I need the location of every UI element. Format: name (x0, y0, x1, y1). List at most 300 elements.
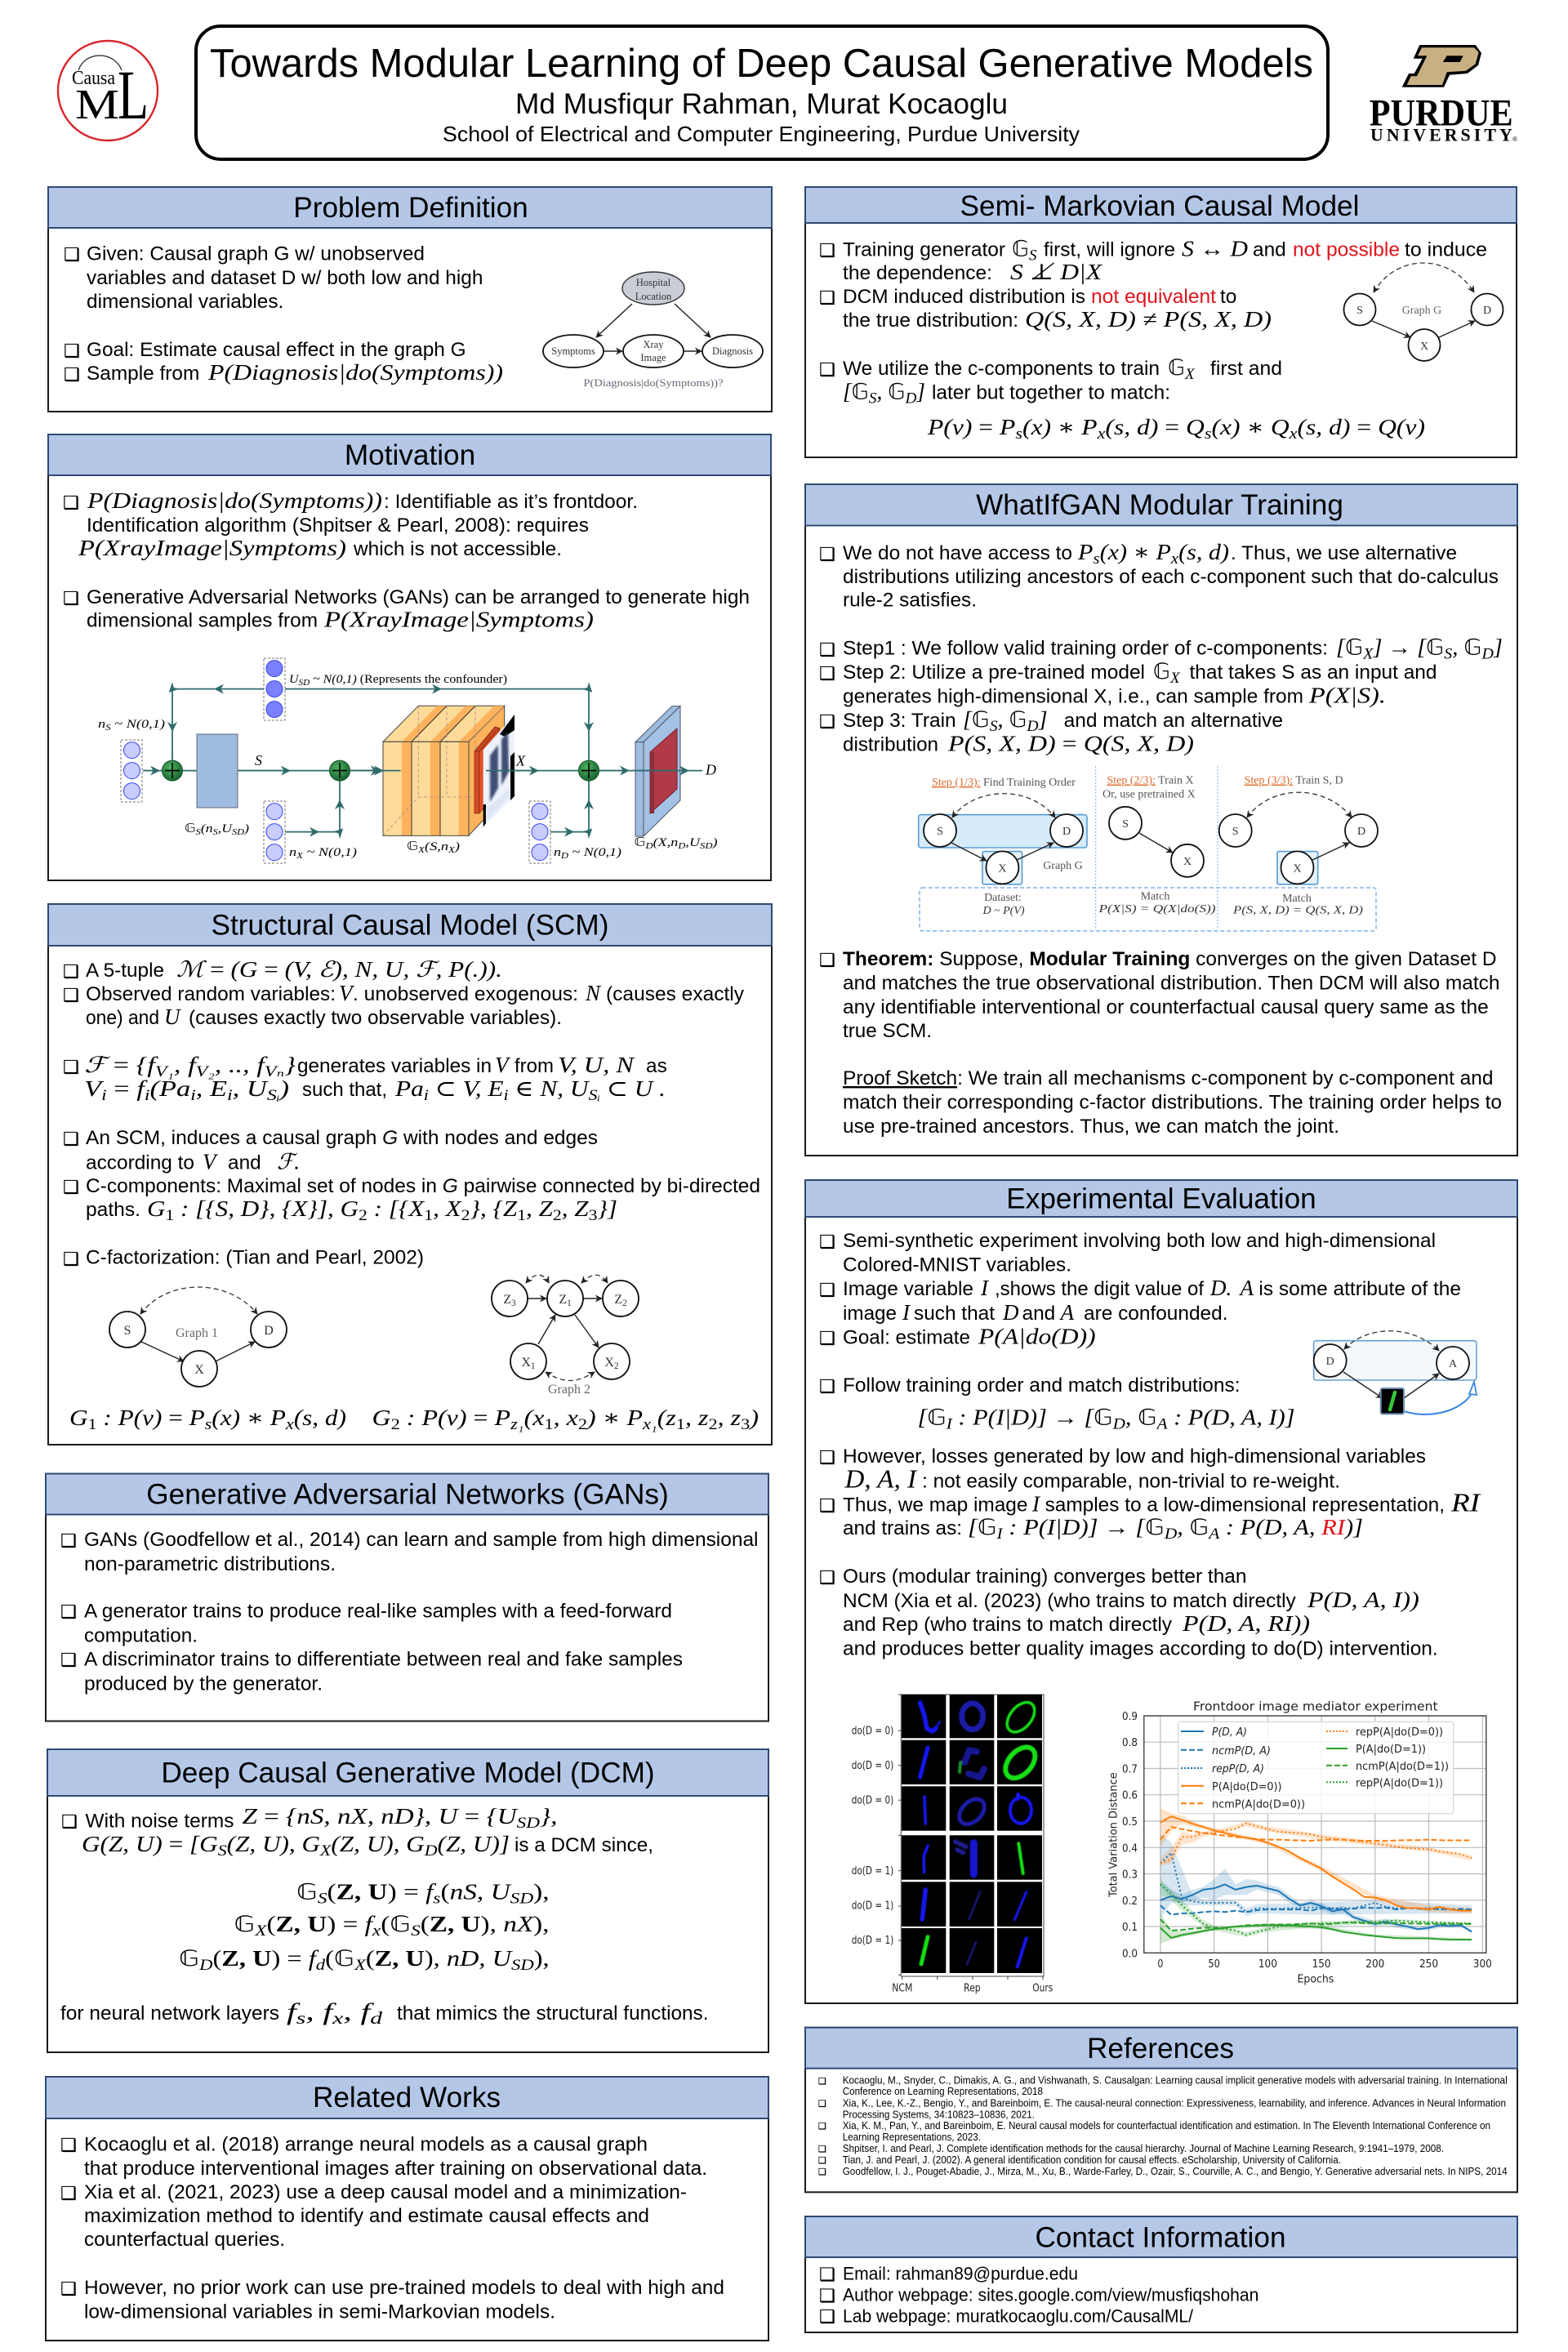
legend: ncmP(D, A) (1212, 1745, 1271, 1757)
equation: G2 factorization: = P (474, 1405, 508, 1430)
text: c-components: 1 (517, 1207, 526, 1224)
y axis (1107, 1711, 1138, 1960)
text: functions: V₂ (196, 1063, 215, 1080)
graph 2: Z (614, 1293, 622, 1307)
diagram: GAN architecture: D (644, 842, 653, 851)
text: functions: V (495, 1053, 511, 1077)
diagram: graph G: X (1420, 341, 1428, 353)
text: mapping: , (1177, 1515, 1190, 1539)
text: goal (819, 1325, 1096, 1349)
diagram: GAN architecture: ) (711, 836, 717, 849)
text: GANs arrangement: P(XrayImage|Symptoms) (323, 608, 594, 632)
equation: G2 factorization: ) ∗ P (586, 1405, 643, 1430)
logo: CausalML: L (118, 56, 149, 134)
text: c-components: , Z (562, 1196, 590, 1221)
text: functions: V, U, N (558, 1053, 635, 1077)
reference list: Kocaoglu, M., Snyder, C., Dimakis, A. G., and Vishwanath, S. Causalgan: Learning causal implicit generative models with adversarial training. In International (843, 2075, 1508, 2087)
text: identifiability: P(XrayImage|Symptoms) (78, 536, 346, 560)
text: functions: ⊂ U . (600, 1076, 666, 1101)
text: functions: i (145, 1087, 150, 1104)
text: step 1: [𝔾 (1336, 635, 1362, 661)
equation: G_X: Z, U ) = f (276, 1912, 371, 1936)
causal diagram: hospital (543, 272, 763, 389)
text: Kocaoglu (60, 2133, 707, 2180)
x axis: 100 (1258, 1958, 1277, 1971)
text: proof sketch: use pre-trained ancestors. Thus, we can match the joint. (843, 1116, 1339, 1138)
equation: training order: : P(I|D)] → [ (952, 1405, 1095, 1429)
text: image variable: D. (1209, 1276, 1232, 1300)
text: no access: distributions utilizing ancestors of each c-component such that do-calculus (843, 566, 1499, 588)
text: theorem: and matches the true observational distribution. Then DCM will also match (843, 972, 1499, 994)
step 3 graph (1219, 792, 1378, 884)
text: image variable: A (1238, 1276, 1254, 1300)
text: step 1: D (1481, 646, 1494, 663)
logo: Purdue University: PURDUE (1370, 92, 1513, 134)
text: functions: as (646, 1055, 667, 1077)
diagram: GAN architecture: ~ N(0,1) (310, 673, 360, 686)
text: causal graph: ℱ. (277, 1150, 300, 1174)
diagram: GAN architecture: ,U (685, 836, 701, 849)
text: image variable: I (980, 1276, 990, 1300)
x axis: Epochs (1297, 1974, 1334, 1986)
equation: matching: (s, d) (1105, 415, 1165, 439)
text: training generator: not possible (1293, 239, 1400, 261)
text: however: low-dimensional variables in semi-Markovian models. (84, 2301, 555, 2323)
equation: G_S: s (433, 1890, 440, 1908)
text: image variable: such that (914, 1303, 995, 1325)
text: mapping: and trains as: (843, 1517, 962, 1539)
text: training generator: ❑ (819, 241, 835, 261)
image grid: generated digits: do(D = 0) (852, 1794, 893, 1806)
equation: G_D: D (198, 1957, 213, 1974)
reference list: ❑ (818, 2121, 826, 2132)
text: variables (63, 981, 745, 1029)
text: step 1: 𝔾 (1426, 635, 1444, 661)
step 1 graph: X (998, 862, 1006, 875)
equation: G_X: Z, U ), nX ), (430, 1912, 546, 1936)
text: functions: , E (196, 1076, 228, 1101)
y axis: 0.8 (1122, 1737, 1138, 1749)
text: step 1: S (1444, 646, 1453, 663)
title block (196, 26, 1328, 159)
image: chest x-ray (483, 715, 514, 827)
diagram: GAN architecture: (S,n (425, 840, 448, 853)
text: no access: We do not have access to (843, 542, 1072, 564)
equation: training order: A (1155, 1416, 1168, 1432)
text: functions: i (424, 1087, 429, 1104)
diagram: GAN architecture: SD (232, 828, 245, 837)
equation: G2 factorization: 1 (676, 1416, 685, 1433)
equation: G2 factorization: G (372, 1405, 388, 1430)
text: step 1: 𝔾 (1463, 635, 1482, 661)
text: theorem (819, 948, 1499, 1042)
text: neural network layers: d (370, 2008, 383, 2028)
image grid: generated digits: do(D = 1) (852, 1900, 893, 1912)
x axis (1157, 1958, 1492, 1986)
text: noise terms: ❑ (61, 1812, 78, 1833)
x axis: 200 (1365, 1958, 1384, 1971)
text: discriminator: A discriminator trains to differentiate between real and fake samples (84, 1649, 683, 1671)
text: functions: V₁ (155, 1063, 174, 1080)
equation: G_S: 𝔾 (296, 1880, 318, 1904)
panel: Semi-Markovian Causal Model (805, 187, 1517, 457)
text: step 2: generates high-dimensional X, i.e., can sample from (843, 686, 1303, 707)
equation: training order: 𝔾 (1138, 1405, 1157, 1431)
text: step 3: 𝔾 (1009, 707, 1027, 733)
equation: training order: : P(D, A, I)] (1168, 1405, 1295, 1429)
heading: Contact Information (805, 2216, 1517, 2257)
step 1 graph: S (937, 826, 943, 838)
equation: G1 factorization: x (285, 1416, 294, 1433)
equation: G2 factorization: : P(v) (400, 1405, 474, 1430)
equation: G2 factorization: x₁ (642, 1416, 657, 1433)
reference list: Xia, K. M., Pan, Y., and Bareinboim, E. Neural causal models for counterfactual identification and estimation. In The Eleventh International Conference on (843, 2120, 1490, 2132)
text: step 2: P(X|S). (1308, 683, 1386, 707)
diagram: GAN architecture: 𝔾 (185, 821, 196, 835)
step 2 graph (1109, 807, 1204, 877)
diagram: GAN architecture: 𝔾 (634, 835, 646, 849)
text: training generator: first, will ignore (1044, 239, 1175, 261)
text: mapping: D (1164, 1526, 1178, 1543)
text: discriminator: ❑ (60, 1650, 77, 1671)
text: c-components training: 𝔾 (888, 380, 905, 405)
text: no access: (s, d) (1178, 540, 1229, 564)
text: c-components: , X (433, 1196, 462, 1221)
text: step 1: ❑ (819, 640, 835, 661)
text: mapping: : P(I|D)] → [ (1003, 1515, 1147, 1539)
text: causal graph: V (203, 1150, 219, 1174)
equation: G_X: x (372, 1922, 381, 1940)
y axis: 0.4 (1122, 1842, 1138, 1855)
text: noise terms: X (319, 1842, 332, 1860)
text: noise terms: With noise terms (85, 1811, 234, 1833)
equation: G1 factorization: (s, d) (294, 1405, 346, 1430)
equation: matching: (x) ∗ Q (1211, 415, 1290, 439)
text: however: However, no prior work can use pre-trained models to deal with high and (84, 2277, 724, 2299)
text: c-components training: We utilize the c-components to train (843, 358, 1160, 380)
diagram: training steps: Or, use pretrained X (1102, 789, 1196, 801)
y axis: 0.7 (1122, 1764, 1138, 1775)
graph 2: X (521, 1356, 531, 1370)
text: generator: A generator trains to produce real-like samples with a feed-forward (84, 1600, 672, 1622)
logo: CausalML: M (75, 82, 119, 128)
diagram: GAN architecture: D (705, 762, 716, 778)
equation: training order: , (1125, 1405, 1138, 1429)
text: losses (819, 1446, 1426, 1494)
panel: Deep Causal Generative Model (47, 1749, 768, 2052)
logo: Purdue University (1370, 45, 1517, 145)
text: mapping: ❑ (819, 1496, 835, 1517)
legend: P(D, A) (1212, 1726, 1247, 1739)
diagram: training steps: Match (1282, 893, 1312, 905)
step 3 graph: S (1232, 826, 1239, 838)
text: training generator: Training generator (843, 239, 1005, 261)
text: identifiability: ❑ (63, 493, 79, 514)
logo: Purdue University: UNIVERSITY (1370, 126, 1512, 145)
text: training order: ❑ (819, 1377, 835, 1397)
reference list: ❑ (818, 2167, 826, 2177)
panel: Related Works (46, 2077, 768, 2341)
text: step 3: ❑ (819, 712, 835, 733)
text: contact details: ❑ (819, 2265, 835, 2285)
text: Kocaoglu: Kocaoglu et al. (2018) arrange neural models as a causal graph (84, 2133, 648, 2155)
text: image variable: D (1002, 1300, 1019, 1325)
text: variables: (causes exactly (606, 983, 745, 1005)
reference list: ❑ (818, 2099, 826, 2109)
text: neural network layers: , f (343, 1998, 374, 2025)
equation: G_S: Z, U ) = f (336, 1880, 432, 1904)
text: neural network layers (60, 1998, 709, 2028)
step 1 graph: Graph G (1043, 860, 1083, 872)
text: functions: ⊂ V, E (429, 1076, 504, 1101)
text: image variable: I (902, 1300, 911, 1325)
text: c-components training: D (904, 390, 917, 408)
text: ours: P(D, A, RI)) (1182, 1611, 1310, 1636)
text: mapping: RI)] (1321, 1515, 1361, 1539)
diagram: D A image graph: A (1449, 1358, 1458, 1370)
image grid: generated digits: Ours (1032, 1982, 1053, 1994)
panel: Structural Causal Model (48, 904, 772, 1445)
text: c-components: G (147, 1196, 163, 1221)
text: c-components: 1 (165, 1207, 174, 1224)
text: identifiability: Identification algorithm (Shpitser & Pearl, 2008): requires (87, 514, 589, 537)
reference list: Learning Representations, 2023. (843, 2132, 981, 2143)
text: c-components: }] (597, 1196, 617, 1221)
text: c-components training: , (877, 380, 888, 404)
text: step 3 (819, 707, 1283, 755)
text: theorem: Theorem: Suppose, Modular Training converges on the given Dataset D (843, 948, 1496, 970)
diagram: training steps: Step (2/3): Train X (1107, 775, 1194, 787)
text: mapping: I (1031, 1491, 1041, 1516)
heading: References: References (1087, 2033, 1234, 2065)
equation: G_D: ), (534, 1946, 550, 1971)
equation: G_D: ( (212, 1946, 221, 1971)
y axis: Total Variation Distance (1107, 1772, 1120, 1898)
text: given: dimensional variables. (87, 291, 283, 313)
text: given: variables and dataset D w/ both low and high (87, 267, 483, 289)
text: c-components: 2 (461, 1207, 470, 1224)
x axis: 150 (1312, 1958, 1331, 1971)
text: not equivalent: Q(S, X, D) ≠ P(S, X, D) (1025, 307, 1272, 332)
graph 2: Z (559, 1293, 567, 1307)
text: c-components: 2 (553, 1207, 562, 1224)
text: noise terms: (Z, U), G (227, 1832, 320, 1856)
text: functions: from (514, 1055, 554, 1077)
diagram: GAN architecture: S (105, 724, 111, 733)
text: causal graph: ❑ (63, 1129, 79, 1150)
equation: G2 factorization: 2 (708, 1416, 718, 1433)
equation: G1 factorization: (x) ∗ P (212, 1405, 286, 1430)
text: mapping: 𝔾 (1145, 1515, 1165, 1540)
reference list: Conference on Learning Representations, 2018 (843, 2086, 1043, 2097)
text: step 3: [𝔾 (963, 707, 989, 733)
text: variables: U (164, 1004, 181, 1029)
graph 2: Z (503, 1293, 511, 1307)
text: image variable: are confounded. (1084, 1303, 1228, 1325)
text: variables: one) and (86, 1007, 159, 1029)
text: c-components training: ] (915, 380, 925, 404)
diagram: GAN architecture: D (560, 852, 569, 861)
text: variables: Observed random variables: (86, 983, 336, 1005)
text: step 1: , (1452, 635, 1463, 660)
text: semi-synthetic: Semi-synthetic experiment involving both low and high-dimensional (843, 1230, 1436, 1252)
text: mapping: A (1207, 1526, 1220, 1543)
equation: matching: = Q(v) (1356, 415, 1417, 439)
step 2 graph: X (1183, 856, 1192, 868)
step 1 graph (924, 794, 1083, 884)
equation: G2 factorization: , z (718, 1405, 742, 1430)
diagram: D A image graph (1314, 1331, 1477, 1414)
heading: DCM (47, 1749, 768, 1796)
diagram: GAN architecture: ~ N(0,1) (111, 718, 165, 731)
image: digit sample (1381, 1388, 1404, 1414)
graph 2: 3 (511, 1298, 516, 1308)
diagram: training steps: Dataset: (984, 892, 1022, 904)
text: GANs arrangement: ❑ (63, 589, 79, 609)
equation: G_X: 𝔾 (234, 1912, 255, 1937)
image grid: generated digits (852, 1695, 1053, 1994)
graph 1: Graph 1 (176, 1326, 218, 1340)
diagram: training steps: Step (1/3): Find Training Order (932, 777, 1076, 789)
diagram: graph G: D (1483, 305, 1491, 317)
text: causal graph: according to (86, 1152, 194, 1174)
graph 2 (492, 1275, 639, 1396)
text: c-components training (819, 355, 1282, 408)
graph 2: X (604, 1356, 614, 1370)
legend: P(A|do(D=1)) (1356, 1744, 1426, 1756)
text: mapping: I (996, 1526, 1004, 1543)
equation: G_S: ), (533, 1880, 550, 1904)
equation: matching: s (1015, 425, 1022, 443)
text: noise terms: SD (517, 1815, 540, 1832)
diagram: GAN architecture: S (196, 828, 202, 837)
text: no access: x (1170, 550, 1179, 568)
text: noise terms: }, (540, 1804, 557, 1829)
text: image variable (819, 1276, 1461, 1325)
equation: training order: D (1112, 1416, 1125, 1432)
graph 2: 2 (614, 1361, 619, 1371)
diagram: training steps (919, 766, 1378, 931)
diagram: training steps: P(X|S) = Q(X|do(S)) (1098, 903, 1216, 915)
diagram: graph G: S (1356, 305, 1363, 317)
text: noise terms: (Z, U)] (438, 1832, 510, 1856)
text: functions: Sᵢ (589, 1087, 600, 1104)
text: contact details (819, 2264, 1258, 2328)
diagram: GAN architecture: X (417, 846, 425, 855)
text: step 3: , (998, 707, 1009, 732)
diagram: GAN architecture: S (213, 828, 219, 837)
panel: Generative Adversarial Networks (46, 1473, 768, 1722)
text: functions: Sᵢ (267, 1087, 280, 1104)
text: no access: (x) ∗ P (1100, 540, 1171, 564)
text: functions: } (284, 1053, 296, 1077)
equation: matching: (s, d) (1297, 415, 1356, 439)
image grid: generated digits: NCM (892, 1982, 912, 1994)
text: step 3: Step 3: Train (843, 710, 956, 732)
text: neural network layers: for neural network layers (60, 2002, 279, 2025)
text: training generator: to induce (1405, 239, 1487, 261)
logo: Purdue University: ® (1512, 136, 1517, 143)
diagram: training steps: D ~ P(V) (982, 905, 1025, 917)
heading: SCM: Structural Causal Model (SCM) (212, 910, 608, 941)
text: step 3: S (990, 718, 998, 735)
text: training order: Follow training order and match distributions: (843, 1374, 1240, 1396)
equation: matching: (x) ∗ P (1022, 415, 1098, 439)
graph 1 (109, 1287, 287, 1387)
text: neural network layers: that mimics the structural functions. (397, 2002, 709, 2025)
text: functions: i (227, 1087, 233, 1104)
text: functions: i (190, 1087, 196, 1104)
text: discriminator (60, 1649, 683, 1695)
panel: Motivation (48, 434, 771, 880)
text: step 1 (819, 635, 1503, 663)
causal diagram: hospital: Hospital (636, 277, 671, 288)
text: neural network layers: x (332, 2008, 344, 2028)
equation: training order: [𝔾 (918, 1405, 944, 1431)
text: c-components: paths. (86, 1199, 140, 1221)
equation: G2 factorization: z₁ (510, 1416, 524, 1433)
affiliation: School of Electrical and Computer Engineering, Purdue University (443, 122, 1080, 146)
plotted series (1160, 1808, 1472, 1944)
heading: Motivation (48, 434, 771, 475)
text: step 1: ] (1493, 635, 1503, 660)
text: 5-tuple: A 5-tuple (86, 960, 164, 982)
diagram: GAN architecture: n (554, 846, 560, 859)
logo: CausalML (58, 41, 158, 140)
equation: G_X: ( (266, 1912, 276, 1936)
equation: G_S: S (318, 1890, 327, 1908)
text: image variable: ❑ (819, 1281, 835, 1301)
diagram: graph G: Graph G (1402, 305, 1441, 317)
text: noise terms: G(Z, U) = [G (82, 1832, 213, 1856)
text: step 3: P(S, X, D) = Q(S, X, D) (947, 731, 1194, 755)
heading: Contact Information: Contact Information (1035, 2222, 1286, 2254)
x axis: 50 (1208, 1958, 1220, 1971)
heading: GANs: Generative Adversarial Networks (GANs) (146, 1479, 669, 1511)
equation: G_D: d (316, 1957, 326, 1974)
image grid: generated digits: do(D = 0) (852, 1760, 893, 1772)
text: proof sketch (843, 1067, 1502, 1138)
equation: G2 factorization: 2 (578, 1416, 587, 1433)
diagram: training steps: Match (1141, 890, 1169, 903)
authors: Md Musfiqur Rahman, Murat Kocaoglu (515, 88, 1008, 120)
diagram: GAN architecture: 𝔾 (407, 839, 418, 853)
y axis: 0.6 (1122, 1790, 1138, 1802)
text: losses: ❑ (819, 1448, 835, 1468)
text: c-components: : [{S, D}, {X}], G (174, 1196, 359, 1221)
text: ours: and produces better quality images according to do(D) intervention. (843, 1637, 1438, 1659)
causal diagram: hospital: P(Diagnosis|do(Symptoms))? (583, 376, 724, 389)
text: not equivalent: not equivalent (1091, 286, 1216, 308)
x axis: 0 (1157, 1958, 1163, 1971)
reference list: ❑ (818, 2155, 826, 2166)
text: functions: i (504, 1087, 509, 1104)
text: sample: Sample from (87, 363, 199, 385)
text: image variable: Image variable (843, 1278, 973, 1300)
text: step 3: and match an alternative (1064, 710, 1283, 732)
graph 2: 1 (567, 1298, 572, 1308)
equation: G_D: Z, U ) = f (221, 1946, 314, 1971)
text: not equivalent: to (1220, 286, 1236, 308)
diagram: GAN architecture: X (296, 852, 304, 861)
graph 2: Graph 2 (548, 1383, 590, 1396)
heading: SCM (48, 904, 772, 946)
text: identifiability: : Identifiable as it’s frontdoor. (384, 491, 638, 513)
y axis: 0.5 (1122, 1816, 1138, 1829)
block: generator layers (383, 706, 505, 835)
line chart: Frontdoor image mediator experiment: Frontdoor image mediator experiment (1193, 1699, 1438, 1713)
heading: Related Works: Related Works (313, 2082, 501, 2114)
